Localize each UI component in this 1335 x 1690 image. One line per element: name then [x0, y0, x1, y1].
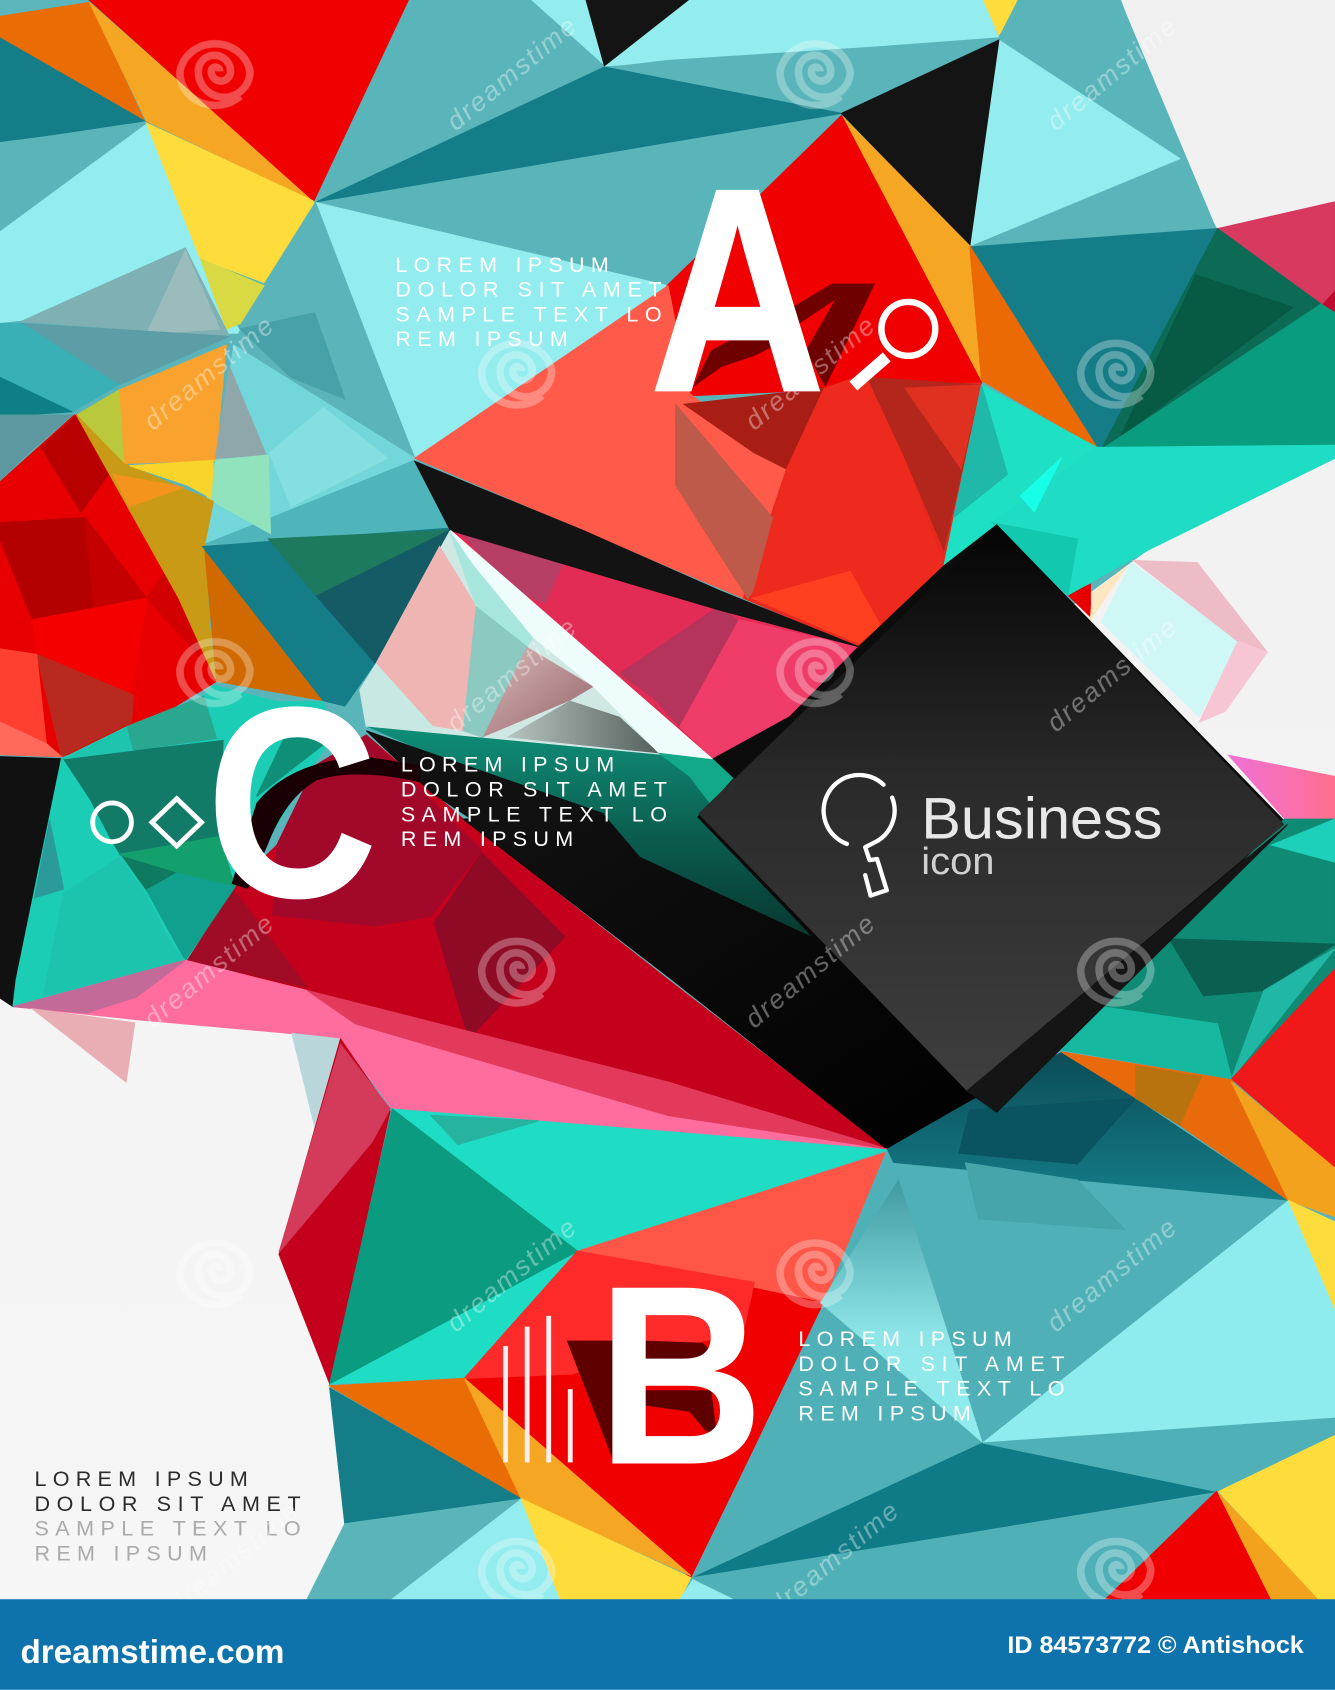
icon: magnifier	[853, 302, 935, 386]
panel: top left polygons	[0, 0, 409, 345]
letter C: C	[206, 650, 378, 955]
watermark: dreamstime text: dreamstime	[1041, 612, 1182, 738]
text block: middle: SAMPLE TEXT LO	[401, 802, 667, 826]
shadow: letter C	[232, 757, 420, 889]
text block: middle	[401, 753, 667, 851]
footer credit: ID 84573772 © Antishock	[1007, 1633, 1305, 1659]
text block: middle: REM IPSUM	[401, 827, 573, 851]
text block: bottom left: SAMPLE TEXT LO	[34, 1517, 301, 1541]
panel: lower right polygons	[680, 819, 1335, 1599]
watermark: dreamstime text: dreamstime	[440, 1212, 582, 1338]
text block: bottom left: DOLOR SIT AMET	[34, 1492, 301, 1516]
text block: top: SAMPLE TEXT LO	[395, 302, 662, 326]
text block: bottom left	[34, 1467, 301, 1565]
text block: top: REM IPSUM	[395, 327, 568, 351]
text block: bottom left: REM IPSUM	[34, 1541, 207, 1565]
panel: left red cluster	[0, 415, 323, 757]
watermark: spirals	[180, 44, 1151, 1603]
text block: middle: LOREM IPSUM	[401, 753, 614, 777]
watermark: dreamstime text: dreamstime	[739, 908, 880, 1034]
shadow: letter B	[567, 1341, 722, 1460]
watermark: dreamstime text: dreamstime	[1041, 1212, 1182, 1338]
watermark: dreamstime text: dreamstime	[162, 1496, 304, 1621]
text block: right: DOLOR SIT AMET	[798, 1352, 1065, 1376]
panel: black shadow band	[366, 525, 1288, 1149]
letter B: B	[597, 1233, 764, 1518]
panel: dark red band	[187, 735, 887, 1149]
icon: circle and diamond	[93, 799, 201, 846]
text block: right: SAMPLE TEXT LO	[798, 1377, 1065, 1401]
watermark: dreamstime text: dreamstime	[739, 310, 880, 436]
panel: dark diamond	[698, 525, 1288, 1112]
watermark: dreamstime text: dreamstime	[763, 1496, 904, 1621]
watermark: dreamstime text: dreamstime	[138, 908, 279, 1034]
footer bar	[0, 1599, 1335, 1690]
text: business: Business	[921, 787, 1163, 852]
icon: bars	[503, 1316, 573, 1462]
panel: pink band	[13, 960, 887, 1149]
shadow: letter A	[693, 284, 875, 387]
text block: top: DOLOR SIT AMET	[395, 278, 662, 302]
text block: bottom left: LOREM IPSUM	[34, 1467, 248, 1491]
watermark: dreamstime text: dreamstime	[440, 612, 582, 738]
footer logo: dreamstime.com	[20, 1634, 284, 1671]
panel: top teal polygons	[315, 0, 999, 458]
panel: central teal polygons	[203, 528, 449, 706]
text block: middle: DOLOR SIT AMET	[401, 778, 667, 802]
text block: right: LOREM IPSUM	[798, 1327, 1012, 1351]
panel: right pale polygons	[1068, 561, 1335, 821]
watermark: dreamstime text: dreamstime	[440, 11, 582, 136]
watermark: dreamstime text: dreamstime	[138, 310, 279, 436]
text block: right: REM IPSUM	[798, 1401, 971, 1425]
letter A: A	[650, 129, 825, 452]
icon: business key	[824, 775, 895, 896]
text: icon label: icon	[921, 840, 995, 882]
panel: left translucent cluster	[0, 205, 449, 550]
panel: lower centre polygons	[279, 1039, 887, 1599]
text block: top: LOREM IPSUM	[395, 253, 609, 277]
watermark: dreamstime text	[138, 11, 1182, 1621]
panel: centre red polygons	[415, 116, 1335, 647]
panel: top right polygons	[842, 0, 1335, 450]
panel: left teal polygons	[0, 686, 333, 1007]
text block: right	[798, 1327, 1065, 1425]
text block: top	[395, 253, 662, 351]
watermark: dreamstime text: dreamstime	[1041, 11, 1182, 136]
panel: pink and black stripes	[360, 461, 859, 760]
